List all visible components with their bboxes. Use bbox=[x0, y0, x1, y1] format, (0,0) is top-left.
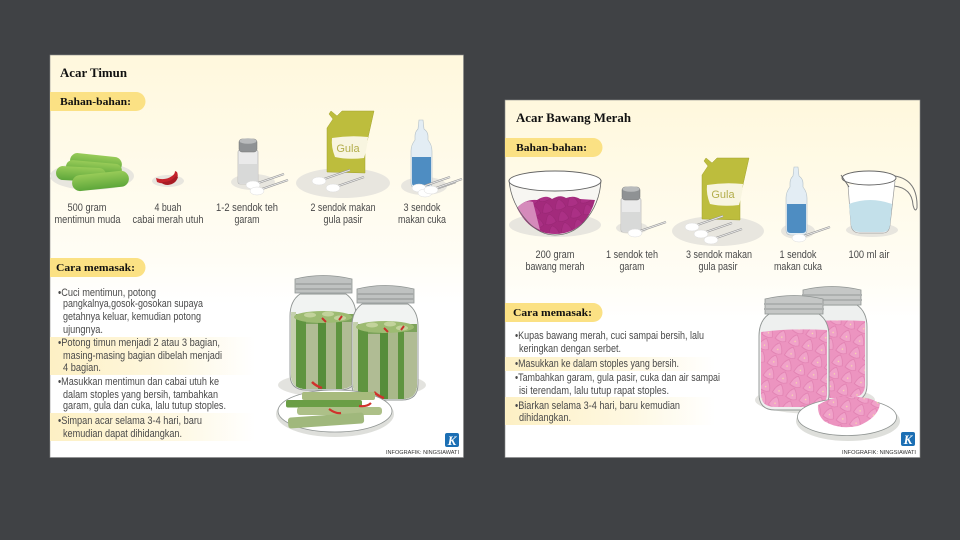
ingredient labels: garam bbox=[234, 214, 260, 226]
cooking steps: •Masukkan mentimun dan cabai utuh ke bbox=[58, 376, 219, 388]
cooking steps: •Simpan acar selama 3-4 hari, baru bbox=[58, 415, 202, 427]
icon: measuring cup of water bbox=[841, 171, 917, 237]
icon: sugar pack and spoons bbox=[296, 111, 390, 198]
credit: INFOGRAFIK: NINGSIAWATI bbox=[842, 450, 916, 456]
ingredient labels: 2 sendok makan bbox=[310, 202, 376, 214]
heading pill: bahan-bahan bbox=[505, 138, 602, 157]
cooking steps: getahnya keluar, kemudian potong bbox=[63, 311, 201, 323]
icon: sugar pack and spoons bbox=[672, 158, 764, 246]
title: acar bawang merah: Acar Bawang Merah bbox=[516, 111, 631, 125]
cooking steps: dihidangkan. bbox=[519, 412, 571, 424]
credit: INFOGRAFIK: NINGSIAWATI bbox=[386, 450, 459, 456]
ingredient labels: 500 gram bbox=[68, 202, 106, 214]
ingredient labels: 200 gram bbox=[536, 249, 574, 261]
heading pill: cara memasak bbox=[50, 258, 146, 277]
cooking steps: masing-masing bagian dibelah menjadi bbox=[63, 350, 222, 362]
cooking steps: •Cuci mentimun, potong bbox=[58, 287, 156, 299]
icon: sugar pack and spoons: Gula bbox=[711, 189, 735, 201]
cooking steps: dalam stoples yang bersih, tambahkan bbox=[63, 389, 218, 401]
cooking steps: •Potong timun menjadi 2 atau 3 bagian, bbox=[58, 337, 220, 349]
icon: cucumbers bbox=[50, 152, 134, 192]
ingredient labels: mentimun muda bbox=[54, 214, 121, 226]
ingredient labels: gula pasir bbox=[698, 261, 738, 273]
icon: sugar pack and spoons: Gula bbox=[336, 143, 360, 155]
logo: kompas bbox=[901, 432, 915, 447]
logo: kompas: K bbox=[447, 433, 458, 448]
ingredient labels: 100 ml air bbox=[848, 249, 890, 261]
cooking steps: kemudian dapat dihidangkan. bbox=[63, 428, 182, 440]
cooking steps: 4 bagian. bbox=[63, 362, 101, 374]
ingredient labels: 1 sendok teh bbox=[606, 249, 658, 261]
ingredient labels: gula pasir bbox=[324, 214, 363, 226]
cooking steps: pangkalnya,gosok-gosokan supaya bbox=[63, 298, 204, 310]
ingredient labels: makan cuka bbox=[398, 214, 447, 226]
logo: kompas: K bbox=[903, 432, 914, 447]
icon: chili bbox=[152, 171, 184, 187]
heading pill: bahan-bahan bbox=[50, 92, 146, 111]
panel: acar bawang merah bbox=[505, 100, 920, 458]
ingredient labels: 1 sendok bbox=[780, 249, 817, 261]
ingredient labels bbox=[526, 249, 890, 273]
ingredient labels: bawang merah bbox=[526, 261, 584, 273]
heading pill: cara memasak: Cara memasak: bbox=[513, 307, 592, 319]
icon: salt and spoon bbox=[231, 138, 288, 195]
cooking steps: •Kupas bawang merah, cuci sampai bersih, lalu bbox=[515, 330, 704, 342]
ingredient labels: 3 sendok makan bbox=[686, 249, 752, 261]
heading pill: cara memasak: Cara memasak: bbox=[56, 262, 135, 274]
ingredient labels: garam bbox=[620, 261, 644, 273]
icon: vinegar bottle and spoons bbox=[401, 120, 462, 197]
cooking steps: •Tambahkan garam, gula pasir, cuka dan air sampai bbox=[515, 372, 720, 384]
heading pill: bahan-bahan: Bahan-bahan: bbox=[516, 142, 587, 154]
cooking steps bbox=[505, 330, 720, 425]
ingredient labels: 4 buah bbox=[154, 202, 182, 214]
icon: salt and spoon bbox=[616, 186, 666, 237]
ingredient labels: 3 sendok bbox=[404, 202, 441, 214]
cooking steps: •Biarkan selama 3-4 hari, baru kemudian bbox=[515, 400, 680, 412]
heading pill: cara memasak bbox=[505, 303, 602, 322]
cooking steps: isi terendam, lalu tutup rapat stoples. bbox=[519, 385, 669, 397]
ingredient labels: makan cuka bbox=[774, 261, 823, 273]
ingredient labels: cabai merah utuh bbox=[132, 214, 204, 226]
title: acar timun: Acar Timun bbox=[60, 66, 127, 80]
panel: acar timun bbox=[50, 55, 464, 458]
heading pill: bahan-bahan: Bahan-bahan: bbox=[60, 96, 131, 108]
ingredient labels: 1-2 sendok teh bbox=[216, 202, 278, 214]
icon: vinegar bottle and spoon bbox=[781, 167, 830, 242]
infographic canvas bbox=[50, 54, 920, 458]
logo: kompas bbox=[445, 433, 459, 448]
illustration: cucumber jars and plate bbox=[276, 276, 426, 437]
cooking steps bbox=[50, 287, 255, 441]
ingredient labels bbox=[54, 202, 447, 226]
icon: bowl of shallots bbox=[509, 171, 601, 237]
cooking steps: keringkan dengan serbet. bbox=[519, 343, 621, 355]
cooking steps: garam, gula dan cuka, lalu tutup stoples. bbox=[63, 400, 226, 412]
cooking steps: ujungnya. bbox=[63, 324, 103, 336]
illustration: shallot jars and plate bbox=[755, 286, 900, 441]
cooking steps: •Masukkan ke dalam stoples yang bersih. bbox=[515, 358, 679, 370]
